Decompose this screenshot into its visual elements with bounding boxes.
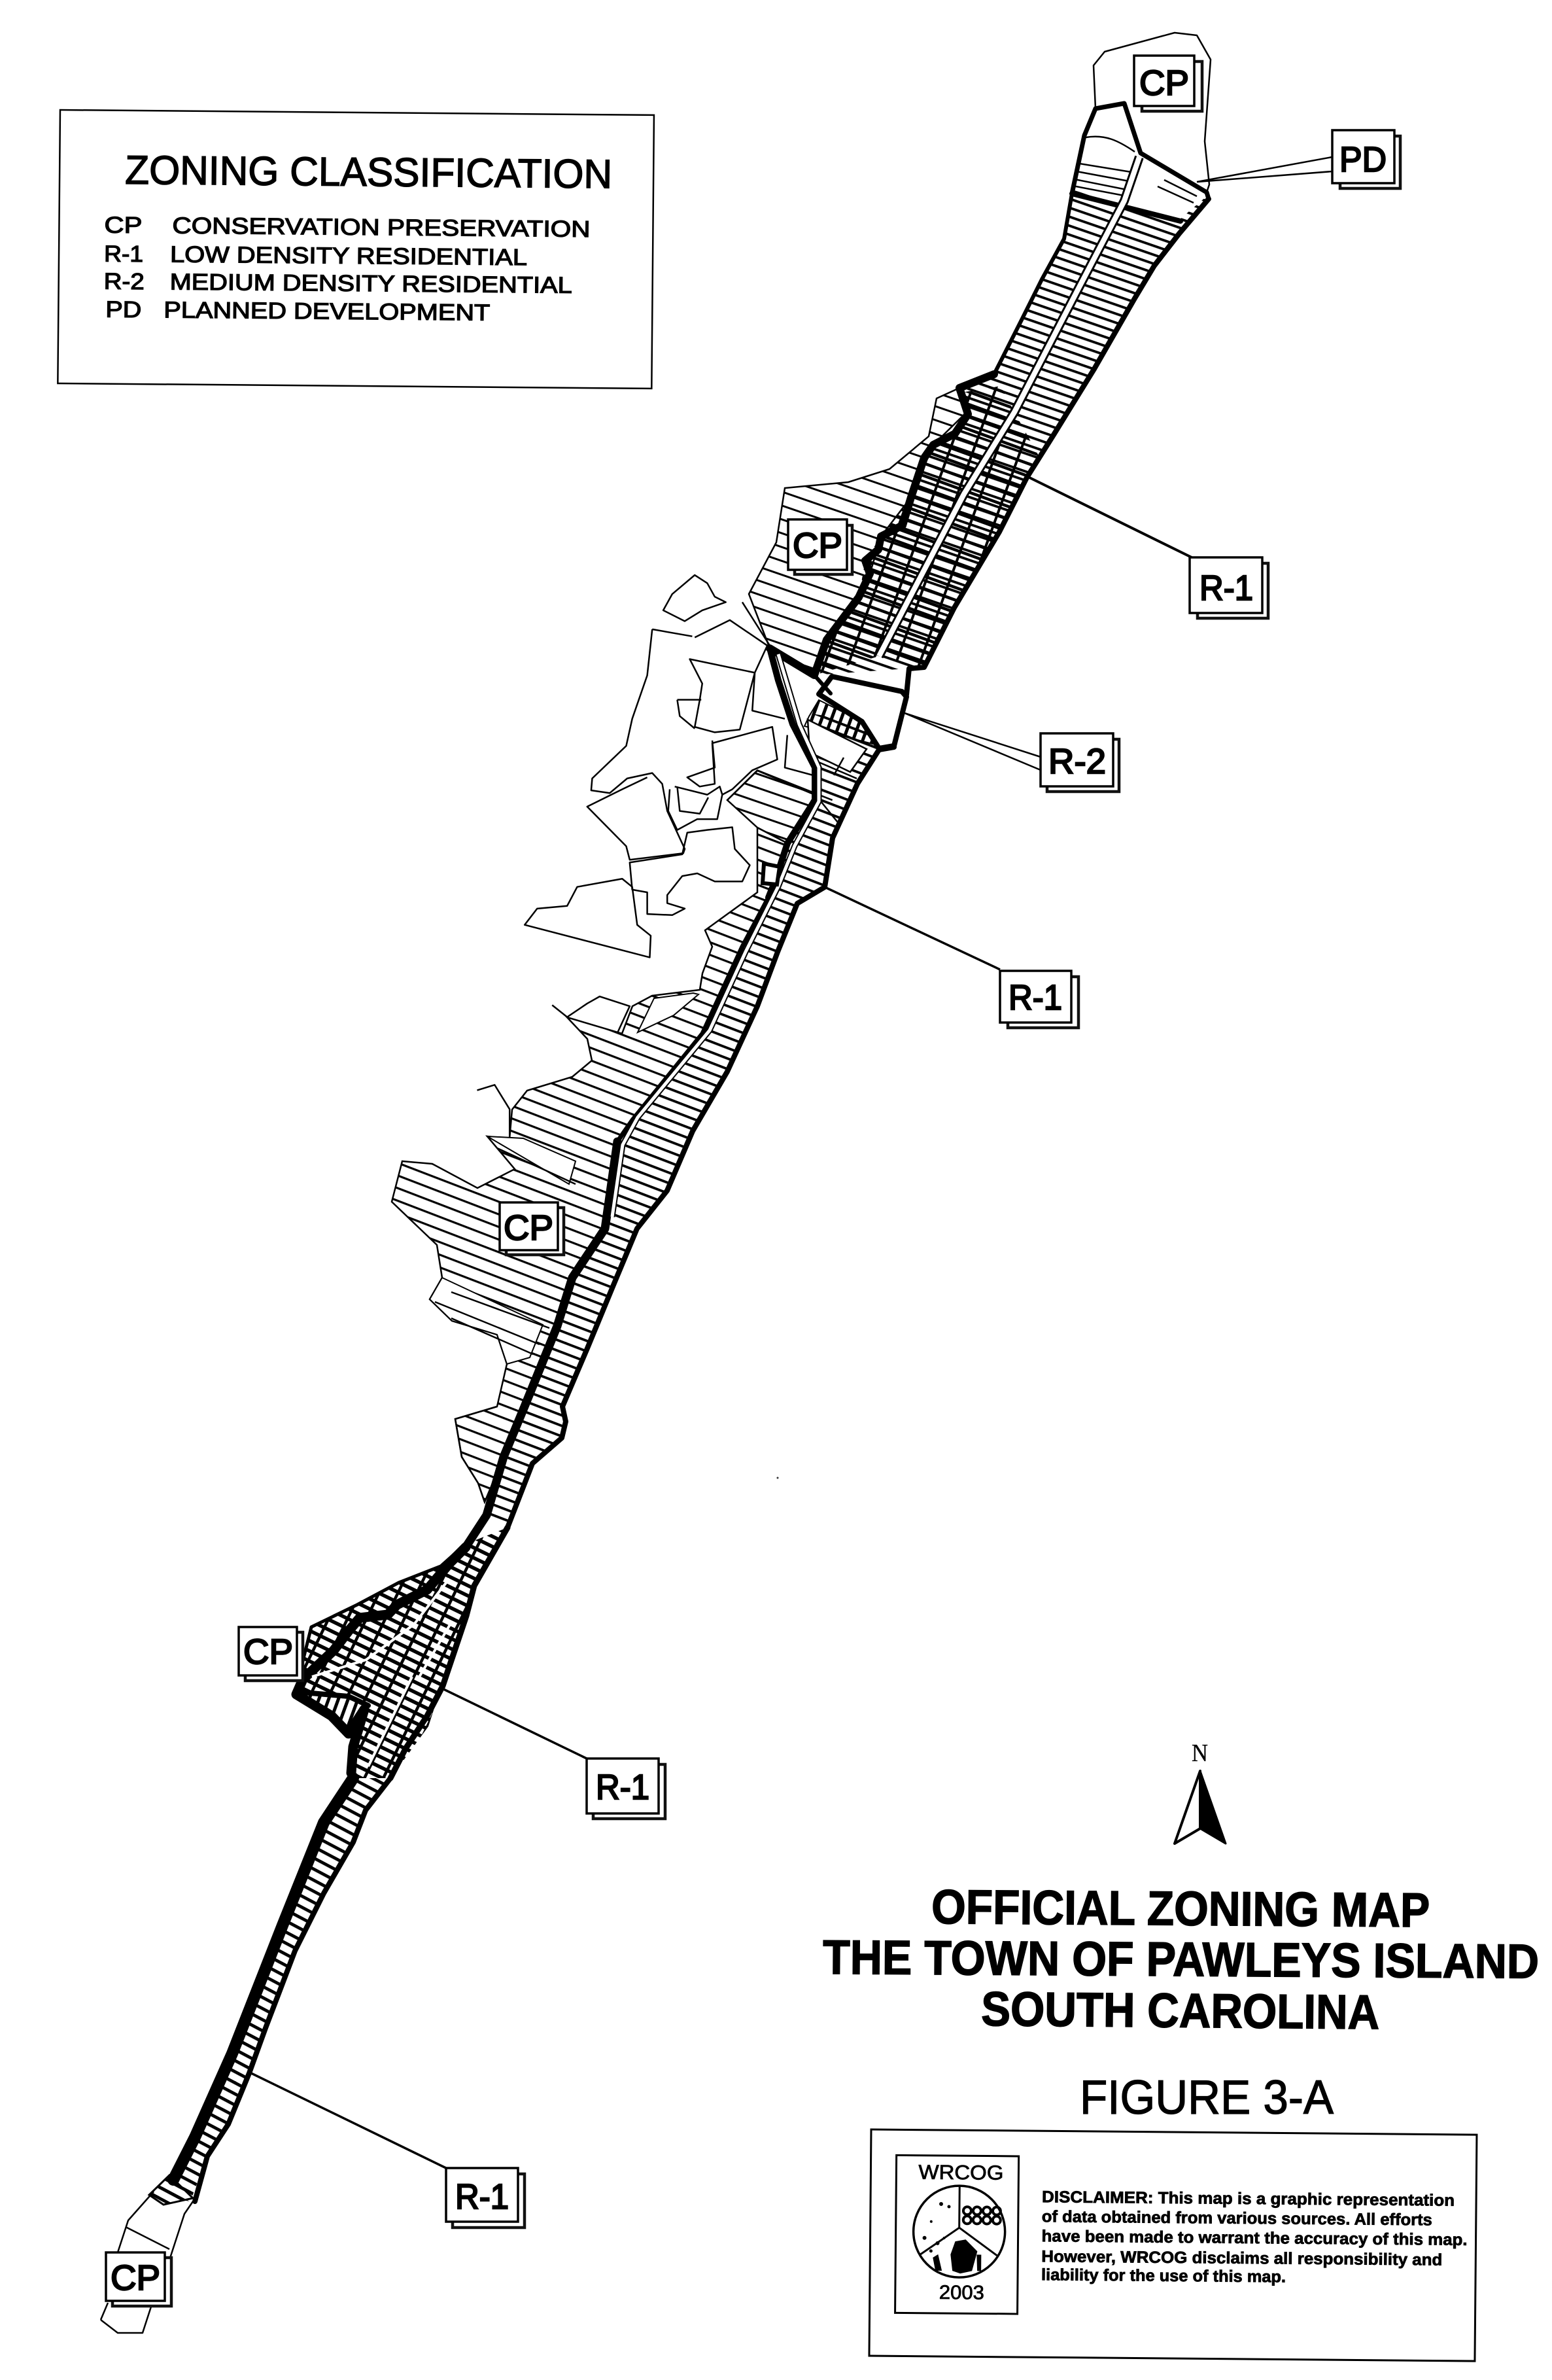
map title: OFFICIAL ZONING MAP	[931, 1880, 1430, 1937]
label: CP mid marsh	[500, 1202, 564, 1255]
label: R-1 north	[1190, 557, 1268, 618]
eastern shoreline	[508, 747, 894, 1528]
thick western zoning boundary	[994, 194, 1072, 374]
label: CP south town: CP	[243, 1632, 293, 1671]
east shoreline	[195, 1778, 390, 2201]
south conservation area	[101, 2175, 193, 2333]
thick zoning line along the road	[768, 648, 815, 898]
logo circle	[913, 2186, 1005, 2278]
white road	[879, 157, 1139, 656]
disclaimer text: of data obtained from various sources. All efforts	[1042, 2207, 1432, 2229]
thick west road line	[173, 1778, 353, 2180]
strip lots	[149, 1778, 390, 2201]
label: R-1 south strip	[446, 2168, 525, 2228]
oceanfront grid blocks	[879, 412, 1040, 667]
white streets	[312, 1579, 451, 1766]
small block at the road	[763, 864, 780, 884]
legend rows: PD	[105, 297, 141, 323]
disclaimer text: liability for the use of this map.	[1041, 2266, 1286, 2286]
north conservation area	[1094, 33, 1211, 192]
legend rows: R-2	[104, 269, 145, 294]
figure label: FIGURE 3-A	[1080, 2071, 1334, 2124]
west bump	[286, 1823, 324, 1916]
label: R-1 south town: R-1	[596, 1768, 649, 1807]
label: R-1 central	[1000, 971, 1078, 1028]
oceanfront and road parcels	[814, 190, 1207, 675]
northern parcels below the PD line	[1072, 135, 1207, 220]
label: R-1 central: R-1	[1009, 978, 1062, 1017]
label: R-1 south strip: R-1	[455, 2177, 509, 2216]
label: CP south tip	[106, 2252, 171, 2306]
map title: SOUTH CAROLINA	[981, 1982, 1380, 2039]
oceanfront parcels	[487, 713, 879, 1528]
marsh outlines west of the island	[477, 575, 837, 1139]
label: CP central marsh	[788, 519, 852, 574]
WRCOG logo panel: 2003	[939, 2282, 984, 2304]
N letter: N	[1192, 1740, 1208, 1767]
R-2 district	[804, 676, 906, 748]
west-of-road parcels	[392, 828, 787, 1502]
zoning classification legend	[58, 110, 654, 389]
label: CP south town	[239, 1627, 303, 1681]
white gaps in the marsh parcels	[487, 993, 698, 1184]
R-2 hatched lots	[804, 700, 879, 748]
upper marsh hatching	[727, 771, 815, 843]
central island parcels	[392, 648, 894, 1547]
thick town boundary	[296, 1547, 466, 1773]
disclaimer text: However, WRCOG disclaims all responsibility and	[1041, 2247, 1442, 2269]
double parcel line	[1072, 194, 1181, 221]
vertical lots	[303, 1692, 366, 1734]
town outline	[390, 1528, 508, 1778]
legend rows: MEDIUM DENSITY RESIDENTIAL	[170, 269, 572, 298]
disclaimer box	[869, 2129, 1477, 2361]
stray speck	[777, 1477, 778, 1479]
street grid blocks beside the road	[814, 386, 1014, 675]
arrow head	[1200, 1771, 1226, 1844]
eastern shoreline	[906, 199, 1209, 695]
map title	[823, 1880, 1539, 2039]
disclaimer text	[1041, 2188, 1468, 2288]
legend rows: CP	[104, 213, 143, 238]
label: CP north	[1134, 56, 1202, 111]
southern marsh tip	[455, 1407, 497, 1502]
label: R-2: R-2	[1048, 742, 1106, 781]
southern strip	[149, 1778, 390, 2201]
southern town grid	[295, 1528, 508, 1778]
north arrow	[1175, 1740, 1226, 1844]
legend title: ZONING CLASSIFICATION	[125, 148, 612, 197]
legend rows	[103, 213, 591, 326]
label: CP south tip: CP	[111, 2258, 160, 2298]
label: CP north: CP	[1139, 63, 1189, 103]
marsh-side hatched parcels	[749, 388, 967, 675]
legend rows: R-1	[104, 241, 143, 267]
label: CP mid marsh: CP	[504, 1208, 553, 1248]
legend rows: LOW DENSITY RESIDENTIAL	[170, 241, 527, 270]
leader lines	[251, 157, 1332, 2168]
R-1 district, northern strip	[749, 103, 1209, 695]
label: R-1 south town	[587, 1759, 665, 1819]
label: CP central marsh: CP	[793, 526, 842, 565]
disclaimer text: DISCLAIMER: This map is a graphic representation	[1042, 2188, 1455, 2210]
legend rows: PLANNED DEVELOPMENT	[164, 297, 490, 326]
town blocks	[295, 1528, 508, 1778]
label: PD: PD	[1339, 140, 1387, 179]
legend rows: CONSERVATION PRESERVATION	[172, 213, 591, 242]
WRCOG logo panel	[895, 2155, 1019, 2314]
WRCOG logo panel: WRCOG	[918, 2161, 1004, 2184]
R-2 boundary	[819, 676, 906, 748]
label: PD	[1332, 130, 1400, 188]
label: R-1 north: R-1	[1199, 569, 1253, 608]
white road	[612, 654, 819, 1217]
label: R-2	[1041, 733, 1119, 792]
thick zoning boundary: PD	[1072, 103, 1209, 199]
disclaimer text: have been made to warrant the accuracy of this map.	[1041, 2227, 1468, 2249]
